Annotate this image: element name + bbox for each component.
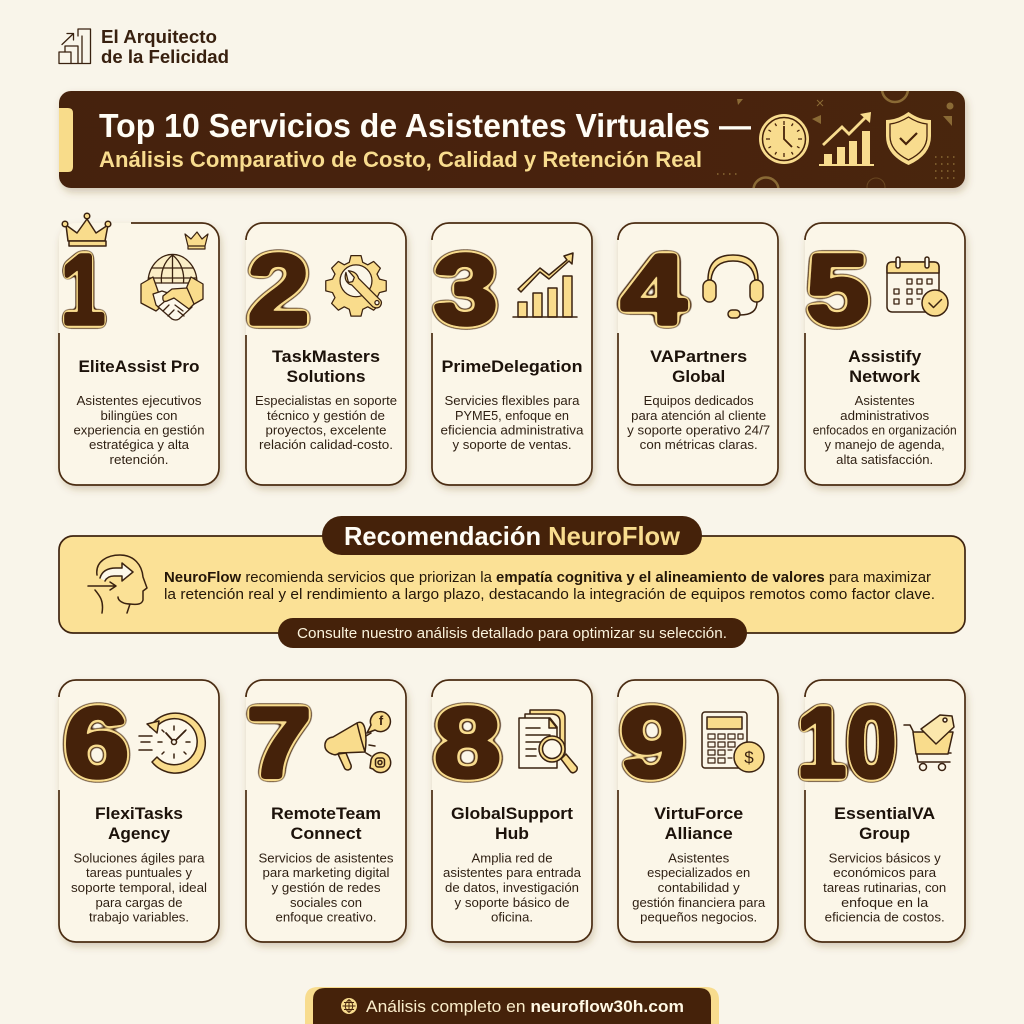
description: asistentes para entrada <box>443 866 581 880</box>
icon text dollar: $ <box>744 748 754 767</box>
number 10: 10 <box>796 688 897 799</box>
description: PYME5, enfoque en <box>455 409 569 423</box>
description <box>627 394 770 452</box>
panel: card 6 FlexiTasks Agency <box>59 680 219 942</box>
description: y soporte básico de <box>454 896 570 910</box>
description <box>74 394 204 467</box>
icon: globe and handshake <box>141 254 203 320</box>
panel: card 1 EliteAssist Pro <box>59 213 219 485</box>
description: experiencia en gestión <box>74 424 204 438</box>
description: trabajo variables. <box>89 910 189 924</box>
description: y manejo de agenda, <box>825 438 945 452</box>
panel: card 2 TaskMasters Solutions <box>246 223 406 485</box>
recommendation heading pill <box>322 516 702 555</box>
description: Asistentes <box>668 852 729 866</box>
description: retención. <box>110 453 168 467</box>
description: pequeños negocios. <box>640 910 757 924</box>
description: sociales con <box>290 896 362 910</box>
description: para cargas de <box>96 896 182 910</box>
icon: growth chart <box>819 112 874 166</box>
description: Asistentes ejecutivos <box>76 394 202 408</box>
description: eficiencia de costos. <box>825 910 945 924</box>
description: Servicios básicos y <box>829 852 941 866</box>
description: proyectos, excelente <box>266 424 386 438</box>
panel: card 3 PrimeDelegation <box>432 223 592 485</box>
description: oficina. <box>491 910 533 924</box>
description: Especialistas en soporte <box>255 394 397 408</box>
name <box>451 805 574 843</box>
name: Alliance <box>665 825 733 843</box>
description: estratégica y alta <box>89 438 189 452</box>
recommendation text: NeuroFlow recomienda servicios que priorizan la empatía cognitiva y el alineamiento de valores para maximizar <box>164 570 931 586</box>
description: Soluciones ágiles para <box>74 852 204 866</box>
description <box>813 394 957 467</box>
description: contabilidad y <box>658 881 740 895</box>
description: Servicios de asistentes <box>258 852 394 866</box>
name <box>271 805 381 843</box>
description <box>255 394 397 452</box>
logo: El Arquitecto de la Felicidad <box>59 26 229 67</box>
banner gold tab <box>59 108 73 172</box>
name <box>834 805 935 843</box>
description <box>823 852 946 924</box>
icon: big crown <box>62 213 111 246</box>
panel: card 10 EssentialVA Group <box>796 680 965 942</box>
name <box>654 805 743 843</box>
logo text <box>101 26 229 67</box>
description: relación calidad-costo. <box>259 438 393 452</box>
name: VAPartners <box>650 348 747 366</box>
name: EliteAssist Pro <box>78 358 200 376</box>
description: de datos, investigación <box>445 881 579 895</box>
panel: card 8 GlobalSupport Hub <box>432 680 592 942</box>
description: con métricas claras. <box>640 438 758 452</box>
recommendation text: la retención real y el rendimiento a largo plazo, destacando la integración de equipos remotos como factor clave. <box>164 587 935 603</box>
name: FlexiTasks <box>95 805 183 823</box>
description <box>443 852 581 924</box>
number 1: 1 <box>61 235 105 346</box>
logo text: El Arquitecto <box>101 26 217 47</box>
icon: calculator with coin <box>702 712 764 772</box>
name: Hub <box>495 825 529 843</box>
icon: headset <box>703 255 763 318</box>
footer bar <box>305 987 719 1024</box>
recommendation text <box>164 570 935 603</box>
description <box>440 394 584 452</box>
description: alta satisfacción. <box>836 453 933 467</box>
name: RemoteTeam <box>271 805 381 823</box>
name <box>95 805 183 843</box>
description: Equipos dedicados <box>644 394 754 408</box>
description <box>71 852 207 924</box>
panel: card 7 RemoteTeam Connect <box>246 680 406 942</box>
icon: shield <box>886 112 931 165</box>
name: Network <box>849 368 921 386</box>
description: enfocados en organización <box>813 424 957 438</box>
panel: card 4 VAPartners Global <box>618 223 778 485</box>
recommendation sub pill <box>278 618 747 648</box>
icon: documents with magnifier <box>519 710 577 773</box>
panel: recommendation NeuroFlow <box>59 516 965 648</box>
description: Servicies flexibles para <box>444 394 580 408</box>
description: económicos para <box>833 866 936 880</box>
description: Asistentes <box>855 394 915 408</box>
name: VirtuForce <box>654 805 743 823</box>
banner decoration <box>717 91 954 188</box>
number 7: 7 <box>246 687 312 799</box>
description: soporte temporal, ideal <box>71 881 207 895</box>
number 4: 4 <box>621 234 686 346</box>
description: para marketing digital <box>262 866 390 880</box>
name: Assistify <box>848 348 922 366</box>
name <box>650 348 747 386</box>
icon: gear and wrench <box>326 256 386 316</box>
description <box>258 852 394 924</box>
icon: logo building chart <box>59 29 90 64</box>
description: enfoque en la <box>841 896 928 910</box>
description <box>632 852 765 924</box>
icon text f: f <box>379 713 384 728</box>
name: Global <box>672 368 725 386</box>
description: tareas puntuales y <box>86 866 193 880</box>
description: administrativos <box>840 409 929 423</box>
name: TaskMasters <box>272 348 380 366</box>
footer text: Análisis completo en neuroflow30h.com <box>366 997 684 1016</box>
name: Group <box>859 825 910 843</box>
number 2: 2 <box>247 235 310 346</box>
recommendation sub pill: Consulte nuestro análisis detallado para optimizar su selección. <box>297 626 727 642</box>
subtitle: Análisis Comparativo de Costo, Calidad y Retención Real <box>99 147 702 172</box>
description: Amplia red de <box>472 852 552 866</box>
icon: calendar with check <box>887 257 948 316</box>
description: y soporte de ventas. <box>452 438 572 452</box>
description: gestión financiera para <box>632 896 765 910</box>
name: Connect <box>290 825 362 843</box>
description: eficiencia administrativa <box>440 424 584 438</box>
name <box>848 348 922 386</box>
description: enfoque creativo. <box>276 910 376 924</box>
number 6: 6 <box>64 687 129 799</box>
icon: cart with price tag <box>904 715 954 770</box>
name <box>272 348 380 386</box>
icon: head with arrow <box>88 555 147 613</box>
icon: globe <box>341 998 357 1014</box>
icon: megaphone with social bubbles <box>325 712 391 773</box>
number 8: 8 <box>434 687 501 799</box>
logo text: de la Felicidad <box>101 46 229 67</box>
description: para atención al cliente <box>631 409 766 423</box>
title: Top 10 Servicios de Asistentes Virtuales — <box>99 107 751 144</box>
name: Agency <box>108 825 171 843</box>
name: EssentialVA <box>834 805 935 823</box>
icon: clock with rewind <box>139 713 205 773</box>
description: especializados en <box>647 866 750 880</box>
panel: title banner <box>57 91 971 196</box>
description: bilingües con <box>100 409 178 423</box>
description: tareas rutinarias, con <box>823 881 946 895</box>
recommendation heading pill: Recomendación NeuroFlow <box>344 521 681 551</box>
description: y soporte operativo 24/7 <box>627 424 770 438</box>
panel: card 9 VirtuForce Alliance <box>618 680 778 942</box>
name: GlobalSupport <box>451 805 574 823</box>
icon: bar chart with arrow <box>513 253 577 317</box>
panel: card 5 Assistify Network <box>805 223 965 485</box>
number 3: 3 <box>434 233 497 345</box>
icon: clock <box>759 114 809 164</box>
name: Solutions <box>286 368 366 386</box>
name: PrimeDelegation <box>442 358 582 376</box>
icon: small crown <box>185 232 208 249</box>
description: y gestión de redes <box>272 881 380 895</box>
description: técnico y gestión de <box>267 409 385 423</box>
number 9: 9 <box>620 687 685 799</box>
number 5: 5 <box>806 233 869 346</box>
